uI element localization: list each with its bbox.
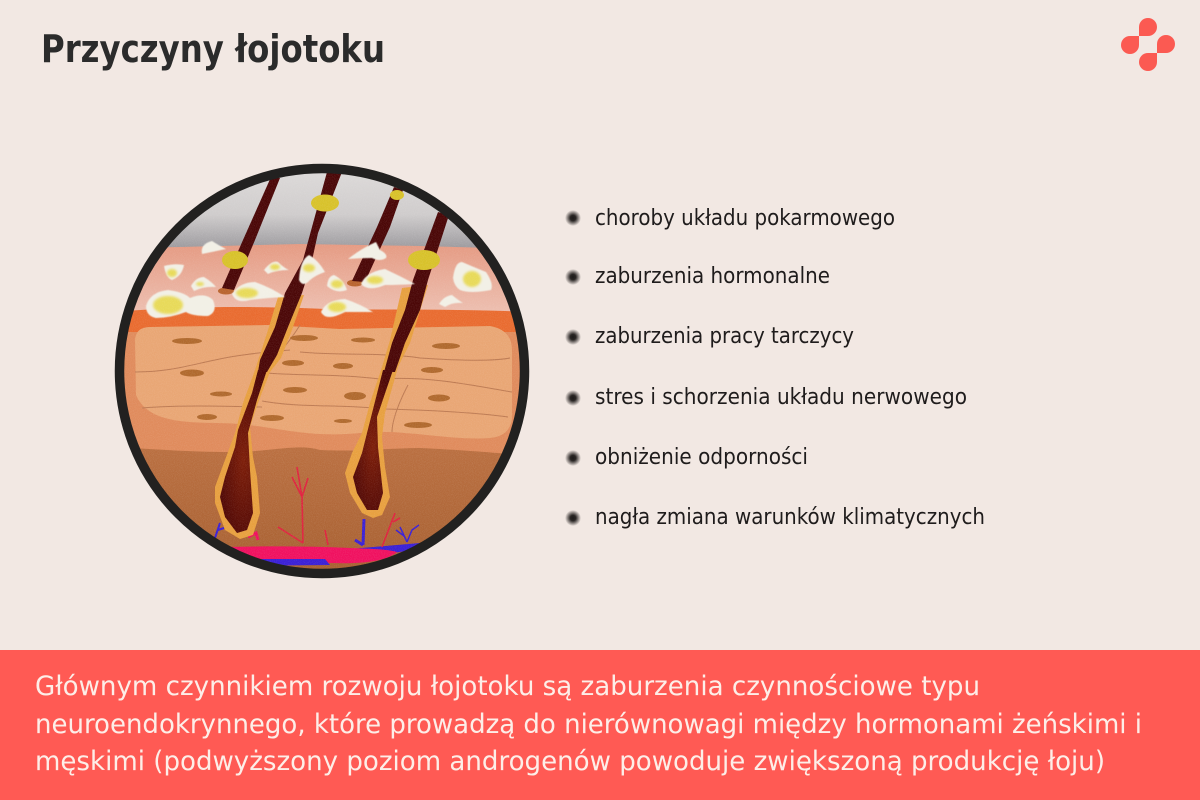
sebum inside flakes	[153, 264, 481, 314]
illustration: skin cross-section with hair follicles	[114, 163, 530, 585]
footer text: Głównym czynnikiem rozwoju łojotoku są zaburzenia czynnościowe typu	[35, 671, 980, 702]
list of causes	[565, 206, 985, 530]
follicle: left long hair	[215, 172, 342, 539]
cause 3: zaburzenia pracy tarczycy	[595, 324, 854, 349]
cause 5: obniżenie odporności	[595, 445, 808, 470]
footer text	[35, 671, 1142, 777]
title: Przyczyny łojotoku	[41, 27, 385, 71]
footer callout	[0, 650, 1200, 800]
cause 1: choroby układu pokarmowego	[595, 206, 895, 231]
circle frame	[120, 168, 524, 574]
layer: air above the skin	[168, 173, 476, 248]
layer: light dermis block	[135, 325, 512, 438]
short hair right	[347, 187, 403, 286]
layer: outer dermis	[114, 332, 530, 460]
cause 6: nagła zmiana warunków klimatycznych	[595, 505, 985, 530]
footer text: męskimi (podwyższony poziom androgenów powoduje zwiększoną produkcję łoju)	[35, 746, 1105, 777]
layer: orange band	[128, 307, 516, 332]
cause 4: stres i schorzenia układu nerwowego	[595, 385, 967, 410]
icon: logo of four drops	[1121, 18, 1175, 71]
layer: deep dermis	[140, 447, 502, 569]
dermis spots	[172, 335, 460, 428]
skin flakes	[146, 241, 492, 318]
footer text: neuroendokrynnego, które prowadzą do nierównowagi między hormonami żeńskimi i	[35, 709, 1142, 740]
layer: upper epidermis	[134, 244, 510, 312]
dermis cell lines	[135, 325, 512, 432]
sebum on hairs	[222, 190, 440, 270]
short hair left	[218, 177, 280, 294]
cause 2: zaburzenia hormonalne	[595, 264, 830, 289]
follicle: right long hair	[345, 212, 449, 518]
blood vessels	[215, 467, 425, 566]
